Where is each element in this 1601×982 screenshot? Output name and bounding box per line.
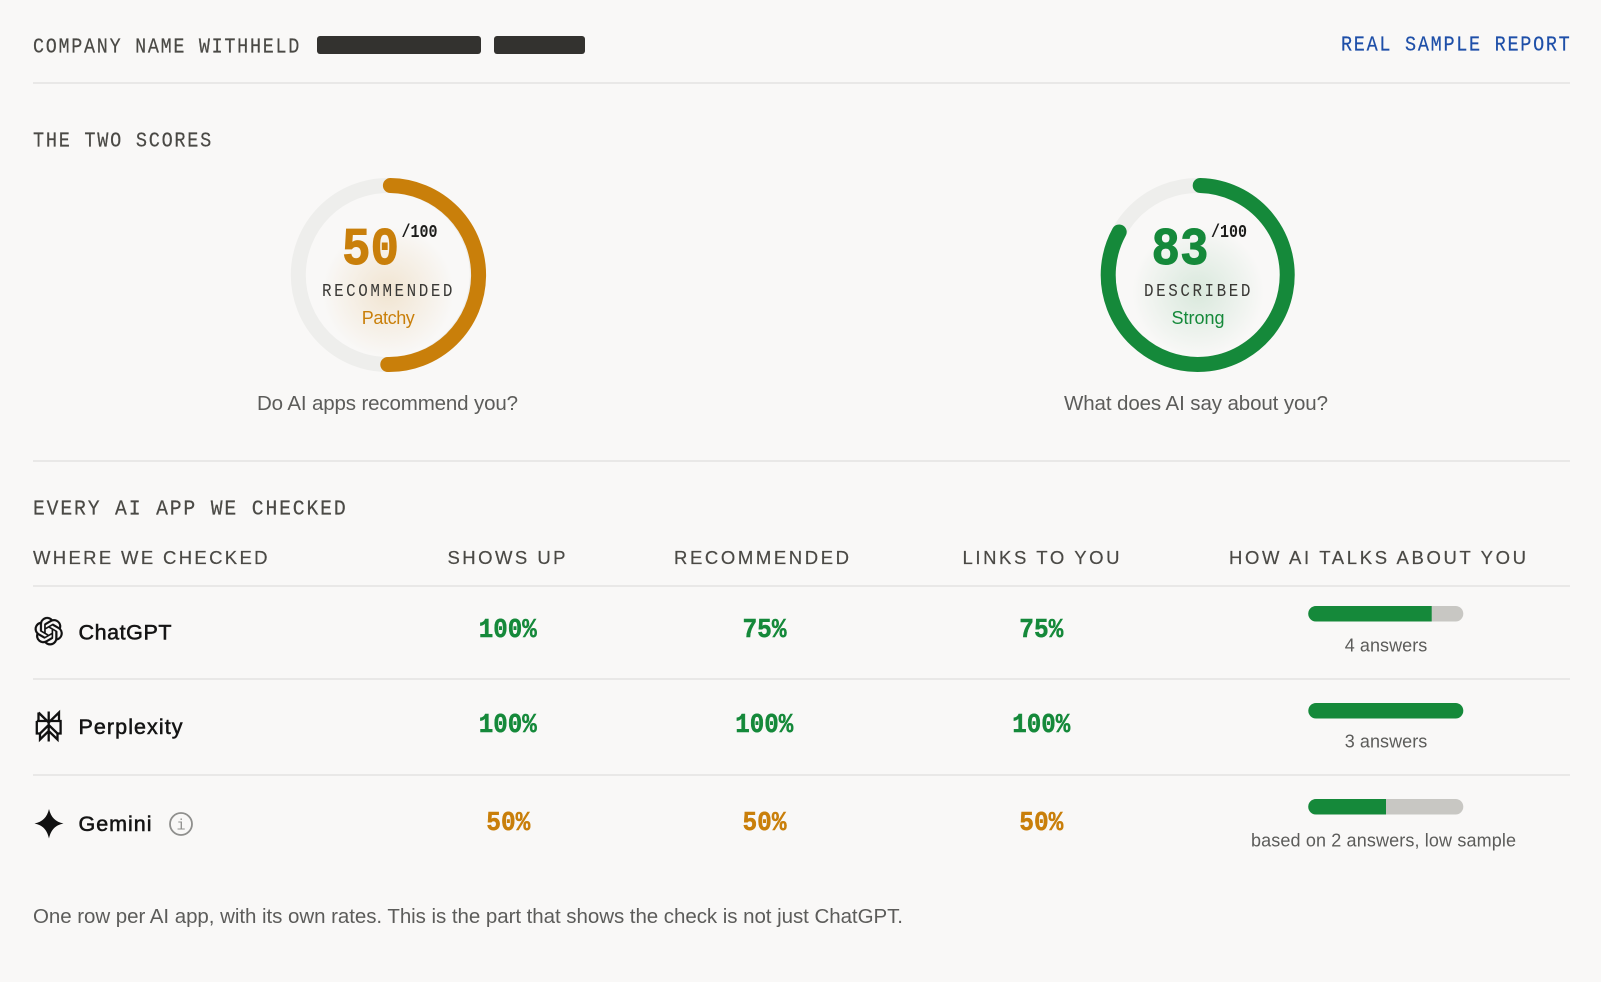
table header row: RECOMMENDED [674, 547, 849, 568]
links: 50% [1019, 809, 1064, 839]
recommended: 50% [742, 809, 787, 839]
ring track [298, 186, 477, 364]
verdict patchy: Patchy [362, 308, 415, 328]
row: Gemini [34, 799, 1516, 851]
icon: info [170, 813, 192, 835]
row: ChatGPT [35, 606, 1463, 656]
panel: recommended score [257, 186, 518, 415]
table header row: SHOWS UP [448, 547, 566, 568]
caption: 3 answers [1345, 732, 1427, 752]
icon: ChatGPT knot [35, 617, 63, 645]
score 50: 50 [342, 220, 399, 280]
icon: info: i [176, 818, 186, 834]
question: What does AI say about you? [1064, 392, 1328, 415]
table header row: LINKS TO YOU [962, 547, 1120, 568]
row: Perplexity [37, 703, 1463, 752]
footnote: One row per AI app, with its own rates. This is the part that shows the check is not just ChatGPT. [33, 905, 903, 928]
sentiment bar [1308, 606, 1463, 622]
recommended: 75% [742, 616, 787, 646]
heading: the two scores: THE TWO SCORES [33, 129, 213, 153]
ring value 50 [388, 186, 479, 365]
out of 100: /100 [402, 223, 438, 243]
header: company name withheld [33, 36, 585, 60]
table header row [33, 547, 1526, 568]
table header row: WHERE WE CHECKED [33, 547, 268, 568]
heading: every AI app we checked: EVERY AI APP WE CHECKED [33, 498, 348, 522]
name: Perplexity [78, 715, 183, 739]
shows up: 50% [486, 809, 531, 839]
redacted block: surname [494, 36, 585, 54]
label described: DESCRIBED [1144, 281, 1253, 302]
panel: described score [1064, 186, 1328, 415]
shows up: 100% [479, 711, 538, 741]
ring value 83 [1108, 186, 1287, 364]
recommended: 100% [735, 711, 794, 741]
links: 100% [1012, 711, 1071, 741]
header: company name withheld: COMPANY NAME WITHHELD [33, 36, 301, 60]
icon: Perplexity mark [37, 712, 61, 742]
sentiment bar [1308, 799, 1463, 814]
shows up: 100% [479, 616, 538, 646]
sentiment bar [1308, 703, 1463, 718]
out of 100: /100 [1211, 223, 1247, 243]
name: ChatGPT [78, 620, 172, 644]
verdict strong: Strong [1172, 308, 1224, 328]
label recommended: RECOMMENDED [322, 281, 455, 302]
redacted block: name [317, 36, 481, 54]
icon: Gemini star [34, 809, 64, 838]
question: Do AI apps recommend you? [257, 392, 518, 415]
table header row: HOW AI TALKS ABOUT YOU [1229, 547, 1526, 568]
caption: 4 answers [1345, 636, 1427, 656]
name: Gemini [78, 812, 152, 836]
score 83: 83 [1152, 220, 1208, 280]
ring track [1108, 186, 1287, 364]
links: 75% [1019, 616, 1064, 646]
caption: based on 2 answers, low sample [1251, 831, 1516, 851]
